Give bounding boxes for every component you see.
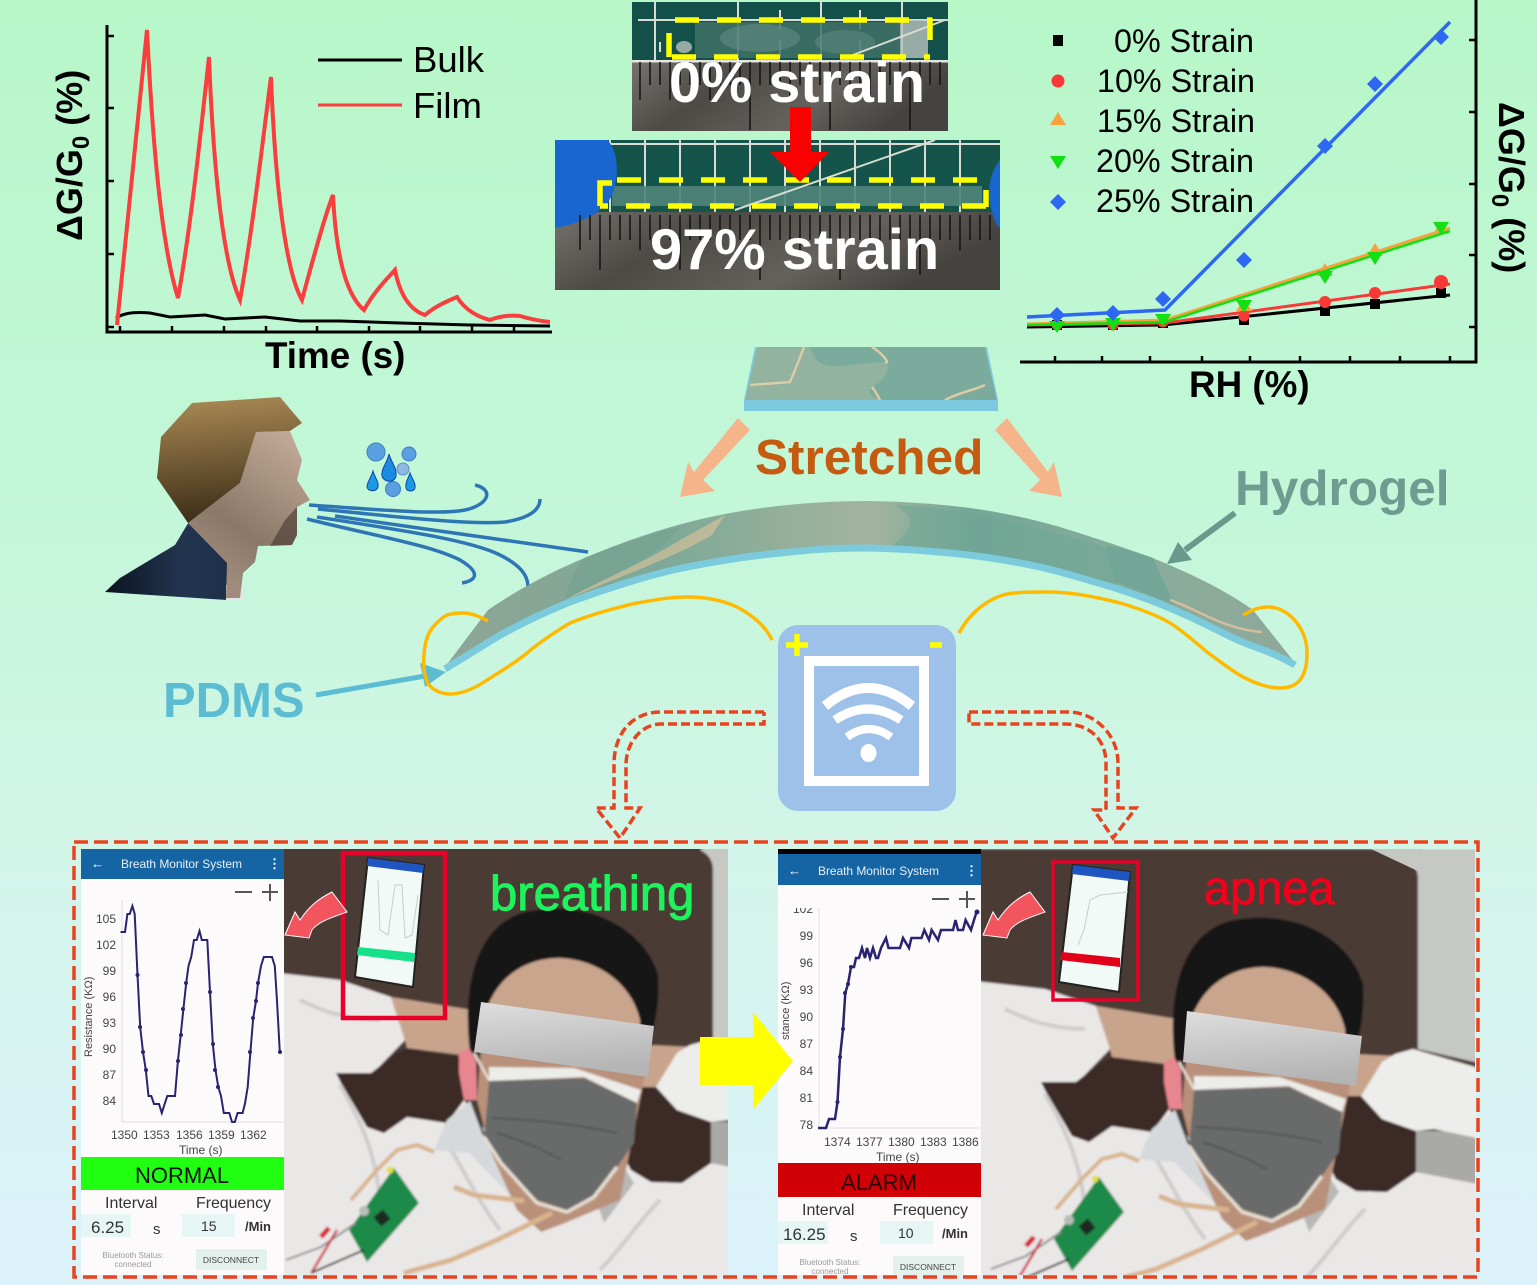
legend: bulk	[318, 58, 402, 62]
readouts: 6.25	[91, 1218, 124, 1237]
arrow: hydrogel pointer	[1167, 513, 1235, 564]
chart: conductance response over time, bulk vs film	[49, 25, 552, 376]
resistance chart: 105	[96, 912, 116, 926]
x axis label: Time (s)	[265, 335, 405, 376]
resistance chart: 102	[96, 938, 116, 952]
highlight box	[600, 180, 986, 207]
zoom controls	[932, 891, 975, 908]
app header: ⋮	[268, 856, 281, 871]
film trace	[117, 30, 550, 325]
legend	[1050, 23, 1255, 219]
arrow: stretched left	[680, 418, 750, 497]
resistance chart: 87	[103, 1068, 116, 1082]
resistance chart	[83, 900, 284, 1157]
readouts: Interval	[105, 1195, 157, 1212]
photo: sample at 97% strain	[555, 140, 1000, 290]
readouts: Bluetooth Status:	[800, 1258, 860, 1267]
resistance chart: stance (KΩ)	[780, 982, 792, 1040]
app header	[81, 849, 284, 879]
label: stretched: Stretched	[755, 430, 983, 485]
readouts: connected	[812, 1267, 848, 1276]
resistance chart: 1362	[240, 1128, 267, 1142]
app header: ⋮	[965, 863, 978, 878]
resistance chart: 96	[103, 990, 116, 1004]
arrow: 0% to 97% strain	[770, 107, 829, 182]
plus terminal	[786, 634, 808, 656]
resistance chart	[780, 886, 981, 1164]
phone app: normal state	[81, 849, 284, 1275]
resistance chart: 1377	[856, 1135, 883, 1149]
icon: wifi	[825, 688, 912, 762]
phone app: alarm state	[778, 849, 981, 1276]
legend label bulk: Bulk	[413, 39, 485, 80]
resistance chart: 78	[800, 1118, 813, 1132]
app header: Breath Monitor System	[121, 857, 242, 871]
y axis label: ΔG/G	[1491, 102, 1532, 194]
resistance chart: Time (s)	[876, 1150, 920, 1164]
readouts: 16.25	[783, 1225, 826, 1244]
x axis label: RH (%)	[1189, 364, 1310, 405]
breath airflow lines	[307, 485, 588, 587]
arrow: breathing to apnea	[700, 1012, 793, 1110]
y axis label: (%)	[49, 70, 90, 136]
censor bar: right	[1183, 1011, 1362, 1086]
y axis label: 0	[68, 136, 95, 149]
arrow: stretched right	[995, 418, 1062, 497]
curved arrow: left inset to app	[285, 892, 347, 938]
arrow: dashed to right panel	[969, 712, 1136, 838]
arrow: PDMS pointer	[316, 663, 446, 695]
resistance chart: 1383	[920, 1135, 947, 1149]
resistance chart: 96	[800, 956, 813, 970]
series 10% strain	[1027, 275, 1450, 330]
phone inset: breathing	[343, 853, 445, 1018]
resistance chart: 1386	[952, 1135, 979, 1149]
readouts: Frequency	[196, 1195, 271, 1212]
resistance chart: 1356	[176, 1128, 203, 1142]
label: 0% strain	[669, 51, 925, 115]
resistance chart: 99	[103, 964, 116, 978]
label: 97% strain	[650, 218, 939, 282]
series 15% strain	[1027, 221, 1450, 324]
wire: left electrode	[424, 597, 772, 694]
label: PDMS: PDMS	[163, 674, 305, 728]
legend: 25% Strain	[1096, 183, 1254, 219]
app header: ←	[788, 863, 801, 878]
resistance chart: 99	[800, 929, 813, 943]
label: apnea: apnea	[1204, 861, 1336, 914]
readouts	[778, 1202, 968, 1276]
resistance chart: 1350	[111, 1128, 138, 1142]
readouts: s	[153, 1221, 160, 1238]
icon: head exhaling	[105, 397, 310, 600]
resistance chart: 102	[793, 902, 813, 916]
highlight box	[669, 18, 932, 57]
readouts: DISCONNECT	[203, 1255, 259, 1265]
resistance chart: 90	[103, 1042, 116, 1056]
resistance chart: Resistance (KΩ)	[83, 977, 95, 1057]
legend: 20% Strain	[1096, 143, 1254, 179]
curved arrow: right inset to app	[983, 892, 1045, 938]
curved hydrogel on PDMS	[445, 501, 1295, 669]
bulk trace	[116, 313, 550, 326]
resistance chart: 1380	[888, 1135, 915, 1149]
resistance chart: 93	[103, 1016, 116, 1030]
resistance chart: 87	[800, 1037, 813, 1051]
app header: Breath Monitor System	[818, 864, 939, 878]
status banner: normal: NORMAL	[135, 1163, 229, 1188]
resistance chart: Time (s)	[179, 1143, 223, 1157]
readouts: Bluetooth Status:	[103, 1251, 163, 1260]
resistance chart: 81	[800, 1091, 813, 1105]
readouts: /Min	[942, 1226, 968, 1241]
legend: 15% Strain	[1097, 103, 1255, 139]
readouts: Interval	[802, 1202, 854, 1219]
legend: 0% Strain	[1114, 23, 1254, 59]
readouts: /Min	[245, 1219, 271, 1234]
app header	[778, 854, 981, 885]
resistance chart: 84	[103, 1094, 116, 1108]
icon: water droplets	[367, 443, 416, 496]
readouts: s	[850, 1228, 858, 1245]
zoom controls	[235, 884, 278, 901]
hydrogel layer	[445, 501, 1295, 667]
app header: ←	[91, 856, 104, 871]
flat stretched hydrogel sheet	[744, 347, 998, 411]
status banner: normal	[81, 1157, 284, 1190]
panel: breathing photo	[284, 849, 728, 1275]
arrow: dashed to left panel	[596, 712, 764, 838]
readouts: 10	[898, 1225, 914, 1241]
legend label film: Film	[413, 85, 482, 126]
wireless module	[778, 625, 956, 811]
series 0% strain	[1027, 288, 1450, 330]
readouts: connected	[115, 1260, 151, 1269]
label: breathing: breathing	[490, 867, 694, 921]
series 20% strain	[1027, 222, 1450, 333]
resistance chart: 90	[800, 1010, 813, 1024]
legend: 10% Strain	[1097, 63, 1255, 99]
y axis label: ΔG/G	[49, 149, 90, 241]
label: hydrogel: Hydrogel	[1235, 461, 1450, 516]
chart: response vs relative humidity at different strains	[1020, 0, 1532, 405]
wire: right electrode	[959, 592, 1307, 688]
status banner: alarm: ALARM	[841, 1170, 917, 1195]
photo: sample at 0% strain	[632, 2, 948, 131]
resistance chart: 1374	[824, 1135, 851, 1149]
resistance chart: 84	[800, 1064, 813, 1078]
resistance chart: 93	[800, 983, 813, 997]
PDMS layer	[445, 548, 1295, 669]
legend: film	[318, 104, 402, 106]
y axis label: (%)	[1491, 207, 1532, 273]
y axis label: 0	[1486, 194, 1513, 207]
readouts	[81, 1195, 271, 1270]
readouts: 15	[201, 1218, 217, 1234]
panel frame: monitoring results	[74, 842, 1478, 1277]
readouts: Frequency	[893, 1202, 968, 1219]
minus terminal	[930, 642, 942, 648]
resistance chart: 1359	[208, 1128, 235, 1142]
status banner: alarm	[778, 1163, 981, 1197]
readouts: DISCONNECT	[900, 1262, 956, 1272]
censor bar: left	[474, 1002, 654, 1077]
panel: apnea photo	[981, 849, 1475, 1275]
series 25% strain	[1027, 22, 1450, 323]
phone inset: apnea	[1053, 862, 1138, 1000]
resistance chart: 1353	[143, 1128, 170, 1142]
